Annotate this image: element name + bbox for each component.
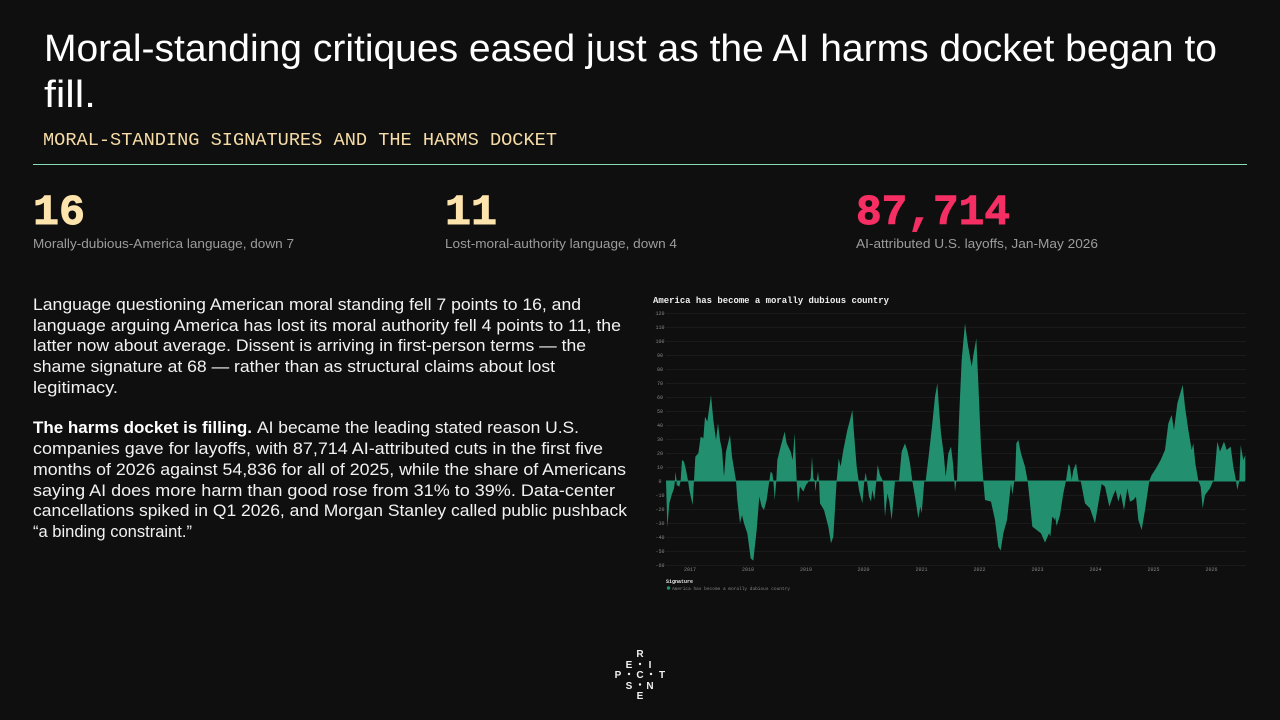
logo: letter cross: R [636, 649, 644, 660]
y axis labels: 50 [657, 409, 663, 415]
y axis labels: 30 [657, 437, 663, 443]
logo: letter cross: C [636, 670, 644, 681]
title: fill. [44, 74, 96, 116]
chart title: America has become a morally dubious country [653, 296, 890, 306]
y axis labels: 0 [658, 479, 662, 485]
x axis labels: 2019 [800, 567, 812, 573]
y axis labels: -50 [655, 549, 665, 555]
stat: lost moral authority [445, 188, 677, 251]
paragraph: harms docket: companies gave for layoffs, with 87,714 AI-attributed cuts in the first five [33, 439, 603, 458]
y axis labels: 120 [655, 311, 665, 317]
y axis labels: -20 [655, 507, 665, 513]
y axis labels: -60 [655, 563, 665, 569]
y axis labels: 40 [657, 423, 663, 429]
y axis labels: 100 [655, 339, 665, 345]
title [44, 28, 1217, 116]
x axis labels: 2020 [857, 567, 870, 573]
paragraph: harms docket: saying AI does more harm than good rose from 31% to 39%. Data-center [33, 481, 615, 500]
logo: letter cross: E [637, 691, 644, 702]
area series [666, 323, 1245, 561]
subtitle: MORAL-STANDING SIGNATURES AND THE HARMS DOCKET [43, 130, 557, 151]
paragraph: moral standing: language arguing America has lost its moral authority fell 4 points to 11, the [33, 316, 621, 335]
x axis labels: 2017 [684, 567, 696, 573]
x axis labels [684, 567, 1218, 573]
legend: Signature [666, 579, 693, 585]
paragraph: harms docket: cancellations spiked in Q1 2026, and Morgan Stanley called public pushback [33, 501, 628, 520]
x axis labels: 2021 [915, 567, 928, 573]
logo: letter cross: E [626, 660, 633, 671]
title: Moral-standing critiques eased just as the AI harms docket began to [44, 28, 1217, 70]
paragraph: moral standing: shame signature at 68 — rather than as structural claims about lost [33, 357, 555, 376]
y axis labels: 70 [657, 381, 663, 387]
y axis labels: 60 [657, 395, 663, 401]
stat: AI layoffs: AI-attributed U.S. layoffs, Jan-May 2026 [856, 236, 1098, 251]
paragraph: harms docket: The harms docket is filling. [33, 418, 252, 437]
logo: letter cross: S [626, 681, 633, 692]
logo: letter cross: T [659, 670, 665, 681]
stat: morally dubious [33, 188, 294, 251]
paragraph: harms docket: months of 2026 against 54,836 for all of 2025, while the share of Americans [33, 460, 626, 479]
y axis labels: -10 [655, 493, 665, 499]
logo: letter cross: P [615, 670, 622, 681]
y axis labels: 110 [655, 325, 665, 331]
paragraph: harms docket [33, 418, 628, 541]
y axis labels [655, 311, 665, 569]
stat: AI layoffs: 87,714 [856, 188, 1010, 237]
x axis labels: 2023 [1031, 567, 1044, 573]
x axis labels: 2018 [742, 567, 754, 573]
legend: America has become a morally dubious country [672, 586, 790, 592]
logo: letter cross: I [649, 660, 652, 671]
x axis labels: 2024 [1089, 567, 1102, 573]
y axis labels: -30 [655, 521, 665, 527]
paragraph: moral standing: latter now about average. Dissent is arriving in first-person terms — the [33, 336, 586, 355]
area chart: America has become a morally dubious country [653, 296, 1246, 592]
stat: AI layoffs [856, 188, 1098, 251]
y axis labels: -40 [655, 535, 665, 541]
logo: letter cross [615, 649, 665, 702]
stat: lost moral authority: 11 [445, 188, 497, 237]
stat: lost moral authority: Lost-moral-authority language, down 4 [445, 236, 677, 251]
paragraph: harms docket: “a binding constraint.” [33, 522, 192, 541]
paragraph: harms docket: AI became the leading stated reason U.S. [257, 418, 579, 437]
paragraph: moral standing: legitimacy. [33, 378, 118, 397]
stat: morally dubious: Morally-dubious-America language, down 7 [33, 236, 294, 251]
x axis labels: 2025 [1147, 567, 1160, 573]
y axis labels: 90 [657, 353, 663, 359]
paragraph: moral standing [33, 295, 621, 397]
x axis labels: 2022 [973, 567, 986, 573]
y axis labels: 80 [657, 367, 663, 373]
legend [666, 579, 790, 592]
logo: letter cross: N [646, 681, 654, 692]
paragraph: moral standing: Language questioning American moral standing fell 7 points to 16, and [33, 295, 581, 314]
y axis labels: 10 [657, 465, 663, 471]
y axis labels: 20 [657, 451, 663, 457]
stat: morally dubious: 16 [33, 188, 85, 237]
x axis labels: 2026 [1205, 567, 1218, 573]
